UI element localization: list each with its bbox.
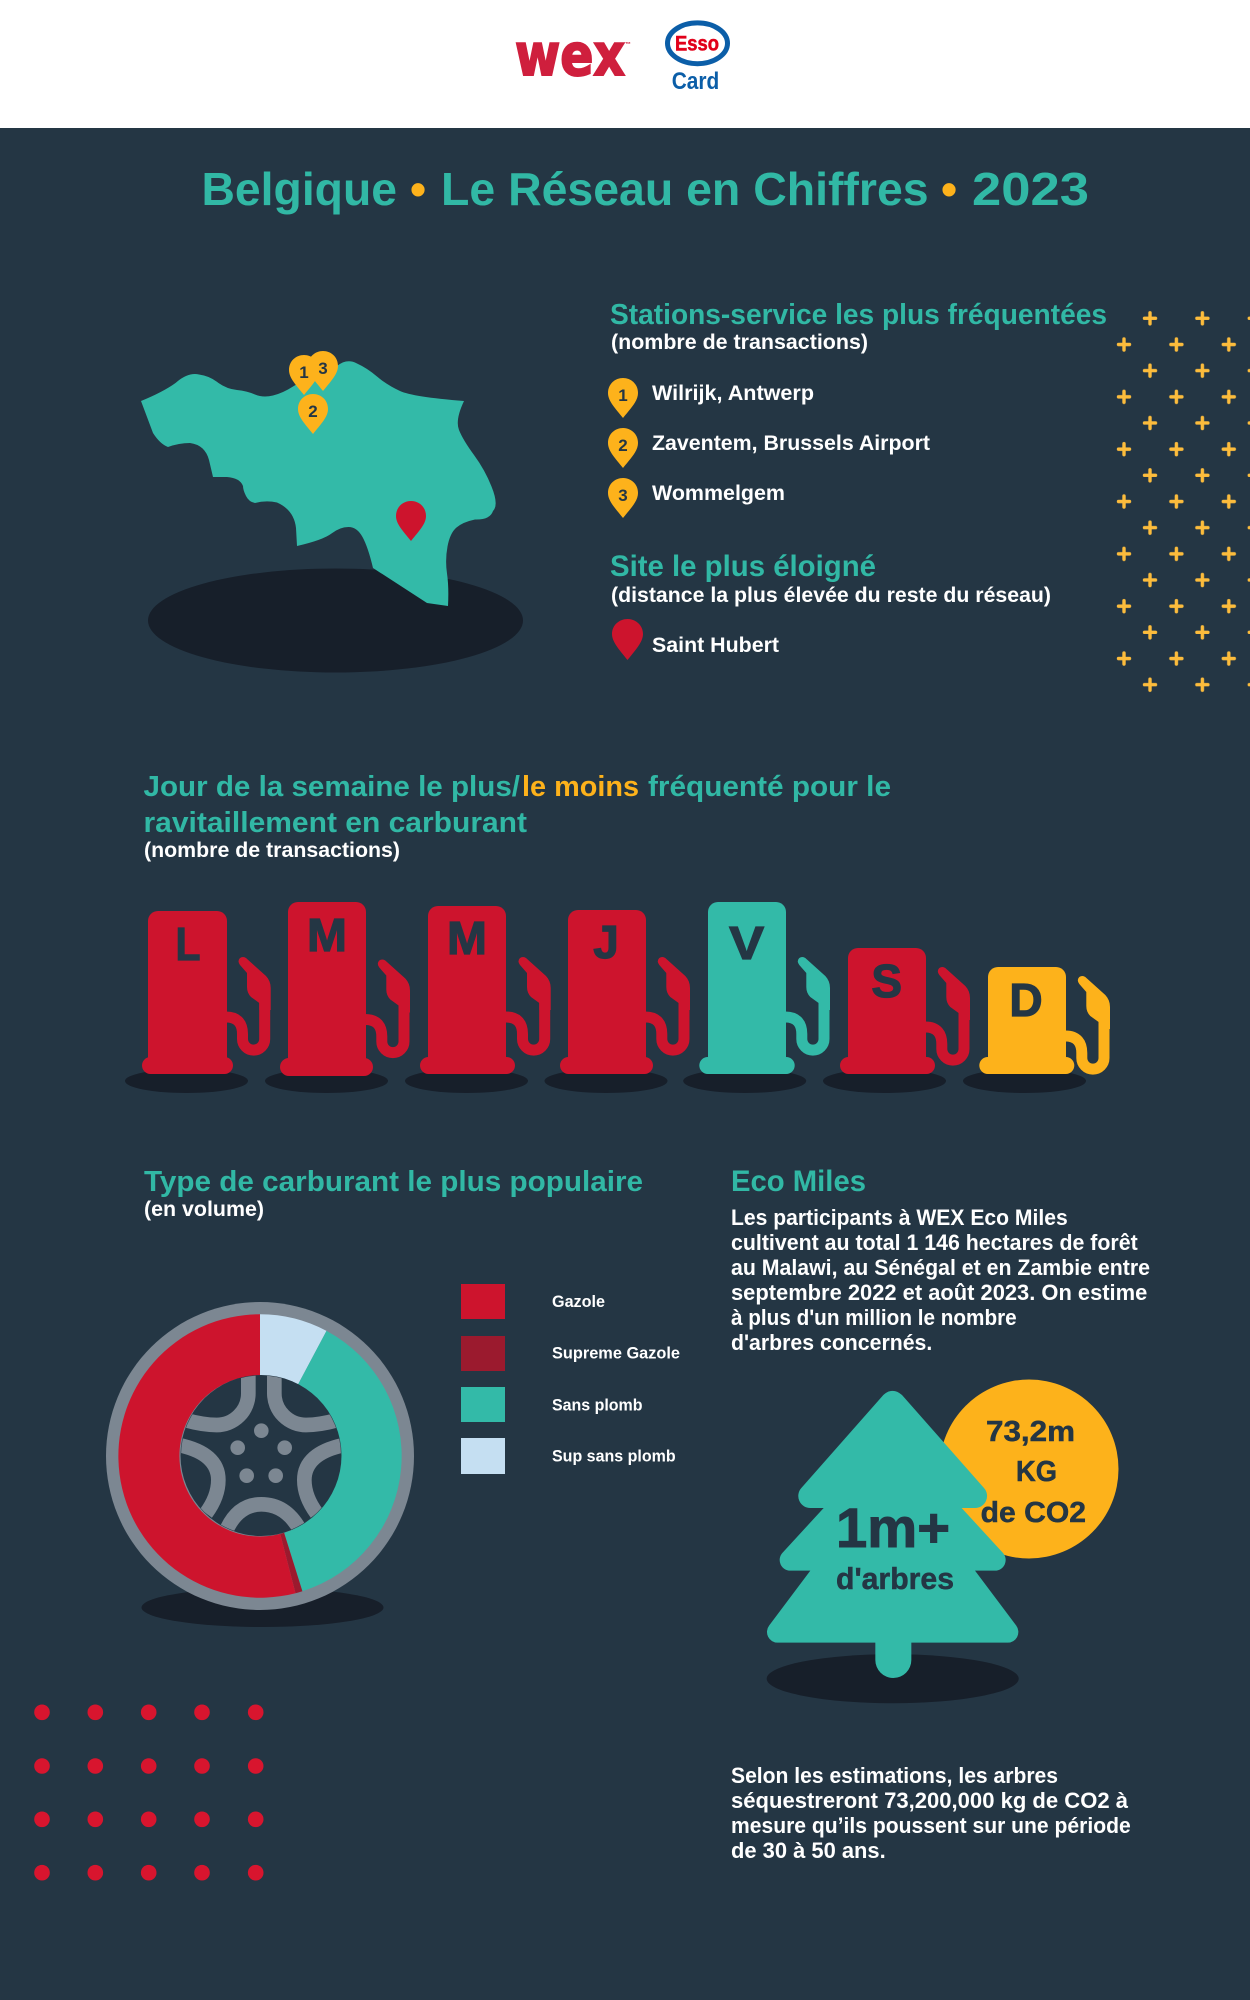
paragraph bbox=[731, 1205, 1150, 1355]
pump: Vendredi (busiest): V bbox=[729, 917, 765, 969]
legend: Gazole bbox=[552, 1293, 605, 1311]
heading: day of the week: ravitaillement en carburant bbox=[144, 807, 527, 839]
heading: day of the week: Jour de la semaine le plus/ bbox=[144, 771, 520, 803]
pump: Dimanche (quietest): D bbox=[1009, 974, 1043, 1026]
pump: Mardi bbox=[265, 902, 410, 1093]
tree label: d'arbres bbox=[836, 1561, 954, 1596]
station 2 bbox=[608, 428, 930, 468]
tree bbox=[767, 1391, 1018, 1678]
heading: fuel type: (en volume) bbox=[144, 1198, 264, 1221]
slice: Supreme Gazole bbox=[280, 1533, 302, 1593]
logo: Esso Card: Card bbox=[672, 68, 719, 95]
heading: day of the week bbox=[144, 771, 891, 862]
map shadow bbox=[148, 568, 523, 672]
pump: Vendredi (busiest) bbox=[683, 902, 830, 1093]
map pin 3 bbox=[308, 351, 338, 391]
legend: Sans plomb bbox=[552, 1397, 642, 1415]
heading: Site le plus éloigné bbox=[610, 550, 876, 583]
heading: fuel type: Type de carburant le plus populaire bbox=[144, 1166, 643, 1198]
pump: Samedi bbox=[823, 948, 970, 1093]
logo: Esso Card bbox=[668, 23, 728, 95]
logo: Esso Card: Esso bbox=[675, 33, 719, 56]
map of Belgium bbox=[141, 351, 523, 672]
pump: Lundi: L bbox=[176, 918, 200, 970]
slice: Gazole bbox=[118, 1314, 296, 1598]
pump: Samedi: S bbox=[871, 955, 902, 1007]
station 1: Wilrijk, Antwerp bbox=[652, 382, 814, 405]
heading: fuel type bbox=[144, 1166, 643, 1221]
heading: Eco Miles bbox=[731, 1165, 866, 1198]
pump: Dimanche (quietest) bbox=[963, 967, 1110, 1093]
paragraph: septembre 2022 et août 2023. On estime bbox=[731, 1280, 1147, 1305]
pump: Mardi: M bbox=[307, 909, 347, 961]
pump: Lundi bbox=[125, 911, 271, 1093]
wheel hub bbox=[179, 1372, 344, 1536]
heading: day of the week: le moins bbox=[522, 771, 639, 803]
station 3: Wommelgem bbox=[652, 482, 785, 505]
slice: Sans plomb bbox=[284, 1331, 402, 1591]
heading: day of the week: (nombre de transactions) bbox=[144, 839, 400, 862]
map pin 2 bbox=[298, 394, 328, 434]
heading: Stations-service les plus fréquentées bbox=[610, 299, 1107, 331]
map pin red bbox=[396, 501, 426, 541]
legend bbox=[461, 1284, 680, 1474]
CO2 circle: de CO2 bbox=[981, 1497, 1086, 1529]
tree label: 1m+ bbox=[836, 1496, 950, 1559]
subheading: (nombre de transactions) bbox=[611, 331, 868, 354]
title: Le Réseau en Chiffres bbox=[441, 163, 929, 215]
tree label bbox=[836, 1496, 954, 1596]
text block: CO2 estimate: Selon les estimations, les arbres bbox=[731, 1763, 1058, 1788]
header band with logos bbox=[0, 0, 1250, 128]
panel: remotest site bbox=[610, 550, 1051, 660]
logo: WEX: ™ bbox=[625, 41, 631, 48]
text block: CO2 estimate: séquestreront 73,200,000 kg de CO2 à bbox=[731, 1788, 1129, 1813]
station 1: 1 bbox=[618, 386, 628, 405]
paragraph: Les participants à WEX Eco Miles bbox=[731, 1205, 1068, 1230]
text block: CO2 estimate bbox=[731, 1763, 1131, 1863]
paragraph: au Malawi, au Sénégal et en Zambie entre bbox=[731, 1255, 1150, 1280]
decorative red dots bbox=[34, 1704, 264, 1880]
slice: Sup sans plomb bbox=[260, 1314, 326, 1385]
panel: Eco Miles bbox=[731, 1165, 1150, 1355]
pump: Jeudi bbox=[544, 910, 690, 1093]
station 3: 3 bbox=[618, 486, 628, 505]
icon: red pin bbox=[612, 619, 643, 660]
pump: Mercredi bbox=[405, 906, 551, 1093]
CO2 circle: 73,2m bbox=[986, 1416, 1075, 1448]
logo: WEX: wex bbox=[515, 21, 625, 89]
chart: fuel pumps per weekday bbox=[125, 902, 1110, 1093]
chart: fuel donut as tyre bbox=[106, 1302, 414, 1627]
paragraph: d'arbres concernés. bbox=[731, 1330, 932, 1355]
subheading: (distance la plus élevée du reste du réseau) bbox=[611, 584, 1051, 607]
title: 2023 bbox=[972, 163, 1089, 215]
map pin 2: 2 bbox=[308, 402, 318, 421]
text block: CO2 estimate: de 30 à 50 ans. bbox=[731, 1838, 886, 1863]
station 2: Zaventem, Brussels Airport bbox=[652, 432, 930, 455]
station 2: 2 bbox=[618, 436, 628, 455]
heading: day of the week: fréquenté pour le bbox=[648, 771, 891, 803]
tree shadow bbox=[767, 1654, 1019, 1703]
site name: Saint Hubert bbox=[652, 634, 779, 657]
title: • bbox=[410, 163, 426, 215]
map pin 1 bbox=[289, 355, 319, 395]
title bbox=[202, 163, 1089, 215]
legend: Supreme Gazole bbox=[552, 1345, 680, 1363]
station 1 bbox=[608, 378, 814, 418]
decorative plus pattern bbox=[1111, 305, 1250, 695]
graphic: tree and CO2 circle bbox=[767, 1380, 1118, 1703]
pump: Jeudi: J bbox=[593, 916, 619, 968]
paragraph: à plus d'un million le nombre bbox=[731, 1305, 1017, 1330]
CO2 circle: KG bbox=[1016, 1456, 1057, 1488]
map pin 1: 1 bbox=[299, 363, 309, 382]
title: • bbox=[941, 163, 957, 215]
station 3 bbox=[608, 478, 785, 518]
map pin 3: 3 bbox=[318, 359, 328, 378]
map shape bbox=[141, 361, 496, 606]
legend: Sup sans plomb bbox=[552, 1448, 676, 1466]
tyre rim bbox=[106, 1302, 414, 1610]
pump: Mercredi: M bbox=[447, 912, 487, 964]
panel: busiest stations bbox=[608, 299, 1107, 518]
title: Belgique bbox=[202, 163, 397, 215]
CO2 circle bbox=[940, 1380, 1118, 1558]
tyre shadow bbox=[142, 1588, 384, 1627]
text block: CO2 estimate: mesure qu’ils poussent sur une période bbox=[731, 1813, 1131, 1838]
paragraph: cultivent au total 1 146 hectares de forêt bbox=[731, 1230, 1138, 1255]
